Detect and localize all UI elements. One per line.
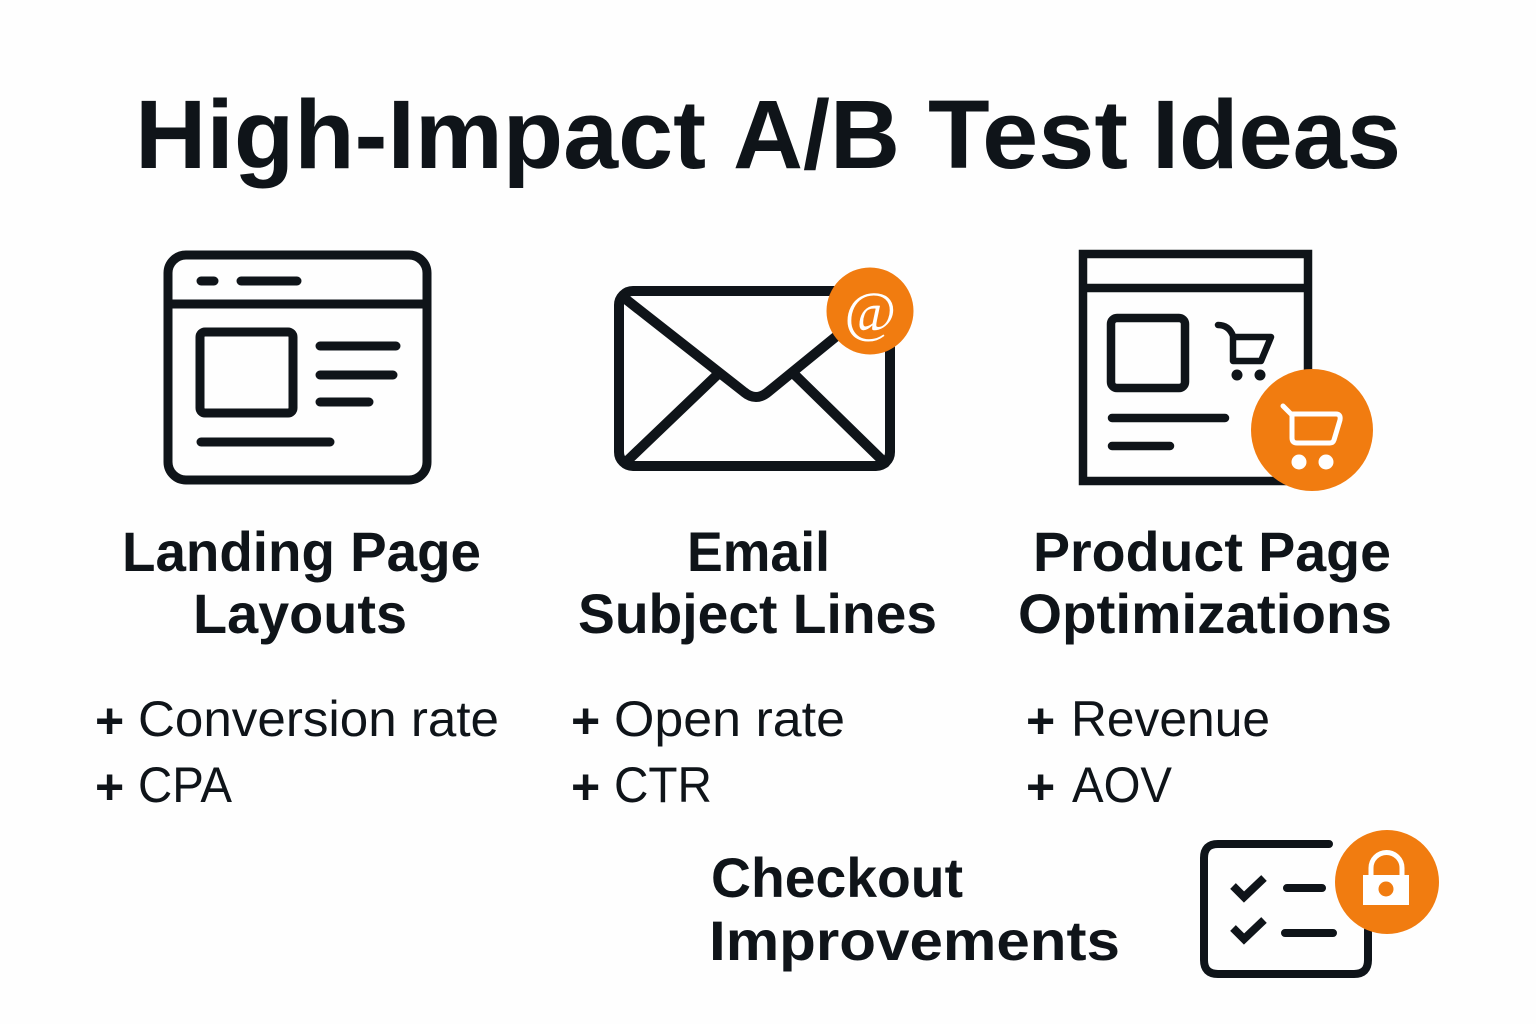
panel: product page optimizations [1018,254,1392,815]
heading: landing page layouts: Layouts [193,582,407,645]
metrics: product page: AOV [1072,757,1173,813]
icon: lock badge [1335,830,1439,934]
title: High-Impact [135,80,706,189]
icon: small cart wheels [1232,370,1266,380]
metrics: email [571,691,845,815]
metrics: product page: Revenue [1071,691,1270,747]
heading: email subject lines [578,520,937,645]
icon: at badge [826,268,914,354]
metrics: product page [1026,691,1270,815]
heading: product page optimizations [1018,520,1392,645]
icon: cart badge [1251,369,1373,491]
metrics: landing page: + [95,693,124,749]
icon: checklist with lock badge [1204,830,1439,974]
metrics: email: + [571,693,600,749]
metrics: landing page: Conversion rate [138,691,499,747]
icon: envelope with at badge [619,268,914,466]
heading: landing page layouts [122,520,481,645]
heading: product page optimizations: Product Page [1033,520,1391,583]
metrics: email: CTR [614,757,712,813]
heading: email subject lines: Subject Lines [578,582,937,645]
metrics: landing page: CPA [138,757,233,813]
metrics: email: Open rate [614,691,845,747]
panel: landing page layouts [95,255,499,815]
heading: checkout improvements [709,846,1120,972]
icon: at badge: @ [844,282,896,344]
icon: browser wireframe [168,255,427,480]
heading: checkout improvements: Checkout [711,846,963,909]
metrics: email: + [571,759,600,815]
metrics: product page: + [1026,693,1055,749]
heading: product page optimizations: Optimizations [1018,582,1392,645]
metrics: product page: + [1026,759,1055,815]
title: A/B [733,80,900,189]
metrics: landing page [95,691,499,815]
heading: checkout improvements: Improvements [709,909,1120,972]
panel: checkout improvements [709,830,1439,974]
icon: product page wireframe [1083,254,1373,491]
panel: email subject lines [571,268,937,815]
title: Ideas [1152,80,1401,189]
heading: landing page layouts: Landing Page [122,520,481,583]
title [135,80,1401,189]
title: Test [928,80,1128,189]
metrics: landing page: + [95,759,124,815]
heading: email subject lines: Email [687,520,830,583]
